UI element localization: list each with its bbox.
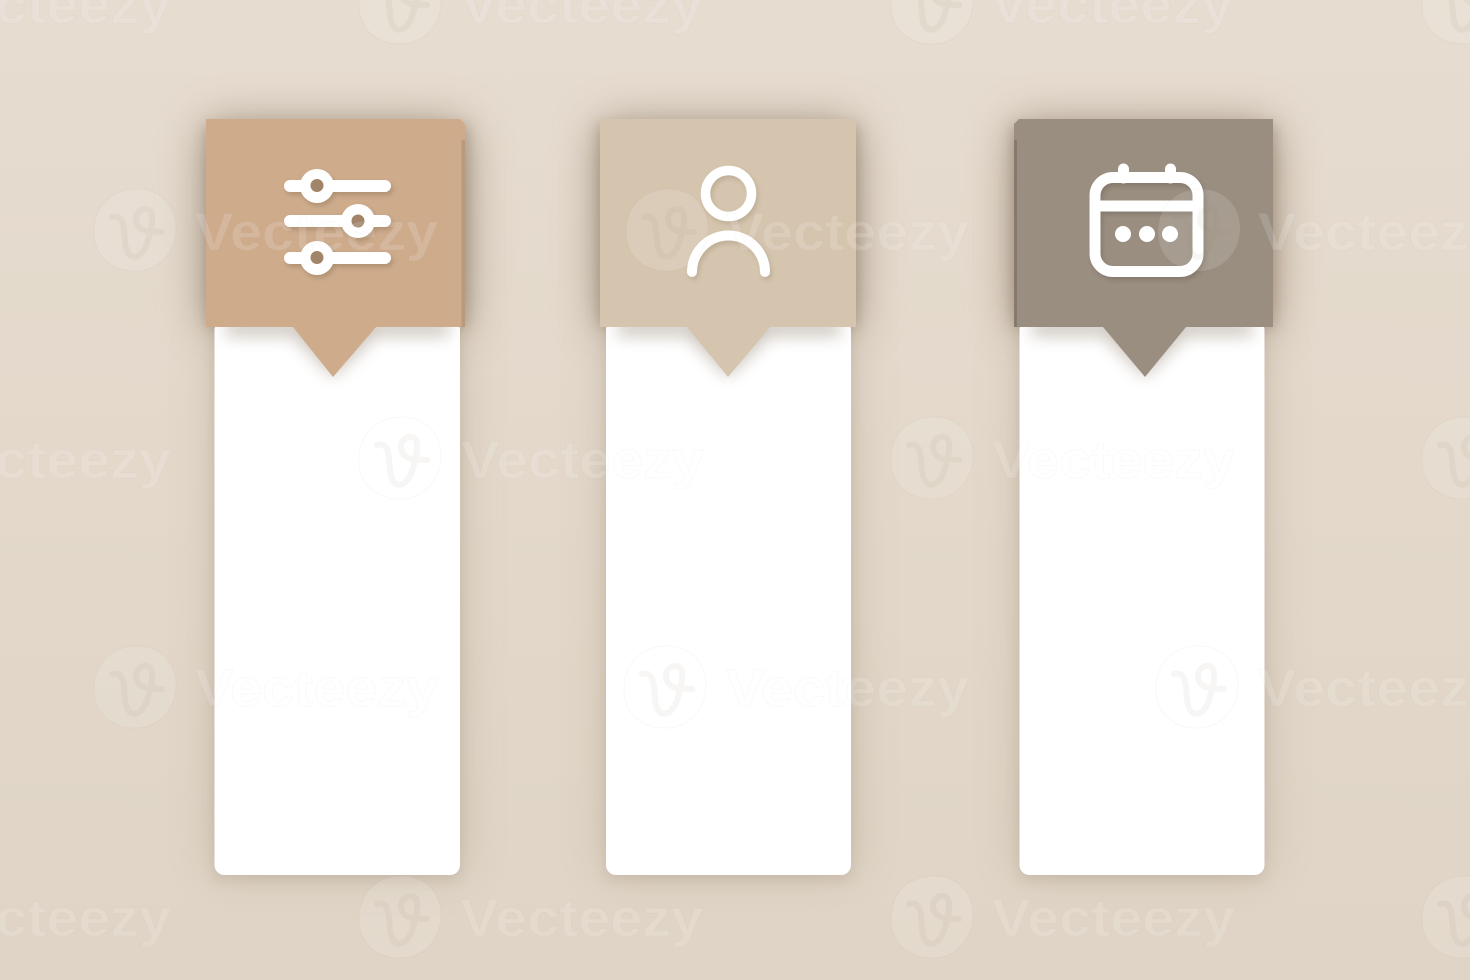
panel: right header tag with pointer: [1014, 119, 1273, 377]
watermark layer: Vecteezy: [461, 431, 705, 490]
panel: middle header tag with pointer: [600, 119, 856, 377]
icon: calendar: [1095, 169, 1200, 274]
watermark layer: Vecteezy: [726, 203, 970, 262]
panel: left white card: [214, 320, 460, 875]
panel: middle white card: [606, 320, 851, 875]
panel: left header tag with pointer: [206, 119, 465, 377]
icon: person: [692, 170, 767, 275]
card shadows on background: [206, 125, 1275, 879]
watermark layer: Vecteezy: [992, 431, 1236, 490]
icon: sliders: [284, 169, 393, 278]
watermark layer: Vecteezy: [195, 203, 439, 262]
watermark layer: Vecteezy: [460, 889, 704, 948]
watermark layer: Vecteezy: [992, 889, 1236, 948]
header shadows on white cards: [226, 320, 1252, 377]
watermark layer: Vecteezy: [726, 659, 970, 718]
watermark layer: Vecteezy: [195, 659, 439, 718]
panel: right white card: [1020, 320, 1264, 875]
